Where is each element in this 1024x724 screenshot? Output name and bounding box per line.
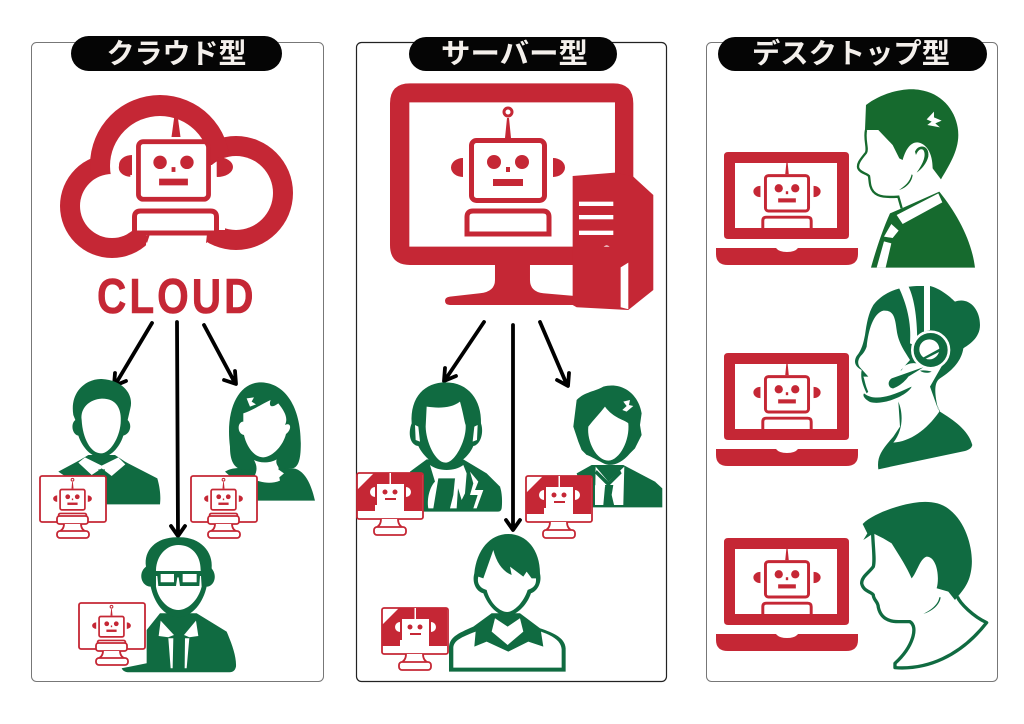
arrows: server to users bbox=[444, 322, 569, 530]
icon: cloud with robot bbox=[60, 95, 293, 262]
monitor filled with robot: user 1 bbox=[357, 473, 423, 535]
panel: desktop type bbox=[706, 37, 998, 682]
heading: desktop type: デスクトップ型 bbox=[752, 37, 950, 69]
heading: cloud type: クラウド型 bbox=[106, 38, 247, 69]
laptop with robot 3 bbox=[716, 538, 858, 651]
panel border: server bbox=[356, 42, 666, 682]
panel: cloud type bbox=[32, 36, 324, 682]
heading: cloud type bbox=[71, 36, 282, 71]
heading: server type bbox=[409, 37, 617, 71]
person: woman with long hair bbox=[225, 382, 315, 501]
person: man in profile bbox=[858, 89, 975, 268]
person: user in open-collar shirt bbox=[449, 534, 566, 672]
person: man with spiky hair bbox=[573, 386, 662, 507]
label: CLOUD: CLOUD bbox=[97, 268, 257, 324]
panel border: desktop bbox=[706, 42, 998, 682]
monitor with robot: user 2 bbox=[191, 476, 257, 538]
heading: desktop type bbox=[718, 37, 987, 71]
panel: server type bbox=[356, 37, 666, 682]
laptop with robot 1 bbox=[716, 152, 858, 265]
monitor filled with robot: user 3 bbox=[382, 608, 448, 670]
person: man with short hair in profile bbox=[862, 502, 987, 668]
icon: desktop monitor with robot and server tower bbox=[390, 83, 653, 310]
arrows: cloud to users bbox=[114, 322, 236, 536]
person: man in suit bbox=[405, 382, 502, 512]
person: man with glasses bbox=[122, 537, 236, 672]
person: man with collar bbox=[58, 379, 160, 504]
monitor with robot: user 3 bbox=[79, 603, 145, 665]
icon: robot on monitor bbox=[451, 108, 565, 234]
heading: server type: サーバー型 bbox=[441, 38, 588, 69]
monitor filled with robot: user 2 bbox=[526, 476, 592, 538]
laptop with robot 2 bbox=[716, 353, 858, 466]
panel border: cloud bbox=[32, 42, 324, 682]
monitor with robot: user 1 bbox=[40, 476, 106, 538]
person: woman with headset bbox=[855, 286, 980, 469]
